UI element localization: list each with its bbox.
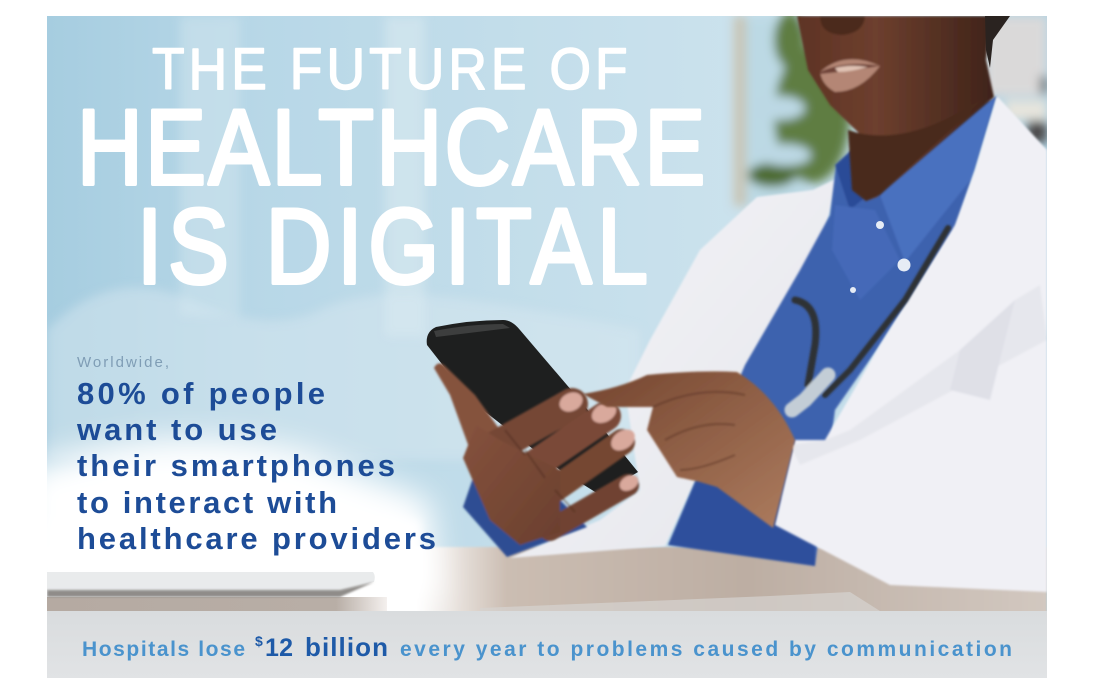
right hand pointing	[583, 371, 795, 528]
title: IS DIGITAL	[137, 187, 648, 307]
title: THE FUTURE OF	[152, 37, 628, 101]
hair	[985, 16, 1010, 68]
panel: bottom banner	[47, 611, 1047, 678]
text block: worldwide statistic: want to use	[76, 412, 277, 447]
neck and face	[797, 16, 994, 201]
text block: worldwide statistic	[76, 354, 436, 556]
coat right side and lapels	[775, 96, 1047, 592]
icon: smartphone	[427, 320, 638, 495]
text block: worldwide statistic: 80% of people	[77, 376, 325, 411]
banner text: every year to problems caused by communication	[400, 638, 1012, 661]
shirt buttons	[850, 221, 910, 293]
banner text: 12	[265, 634, 293, 662]
title	[77, 37, 705, 307]
banner text: Hospitals lose	[82, 638, 245, 661]
left hand holding phone	[434, 363, 641, 557]
desk	[47, 547, 1047, 617]
text block: worldwide statistic: to interact with	[77, 485, 337, 520]
banner text: billion	[305, 632, 388, 662]
banner text: $	[255, 633, 263, 649]
text block: worldwide statistic: their smartphones	[77, 448, 395, 483]
text block: worldwide statistic: Worldwide,	[77, 354, 169, 371]
icon: stethoscope	[792, 228, 948, 410]
banner text	[82, 632, 1012, 662]
text block: worldwide statistic: healthcare providers	[77, 521, 436, 556]
title: HEALTHCARE	[77, 88, 705, 208]
coat body	[510, 178, 838, 558]
shirt	[668, 96, 997, 566]
laptop and soft white haze	[20, 439, 880, 611]
